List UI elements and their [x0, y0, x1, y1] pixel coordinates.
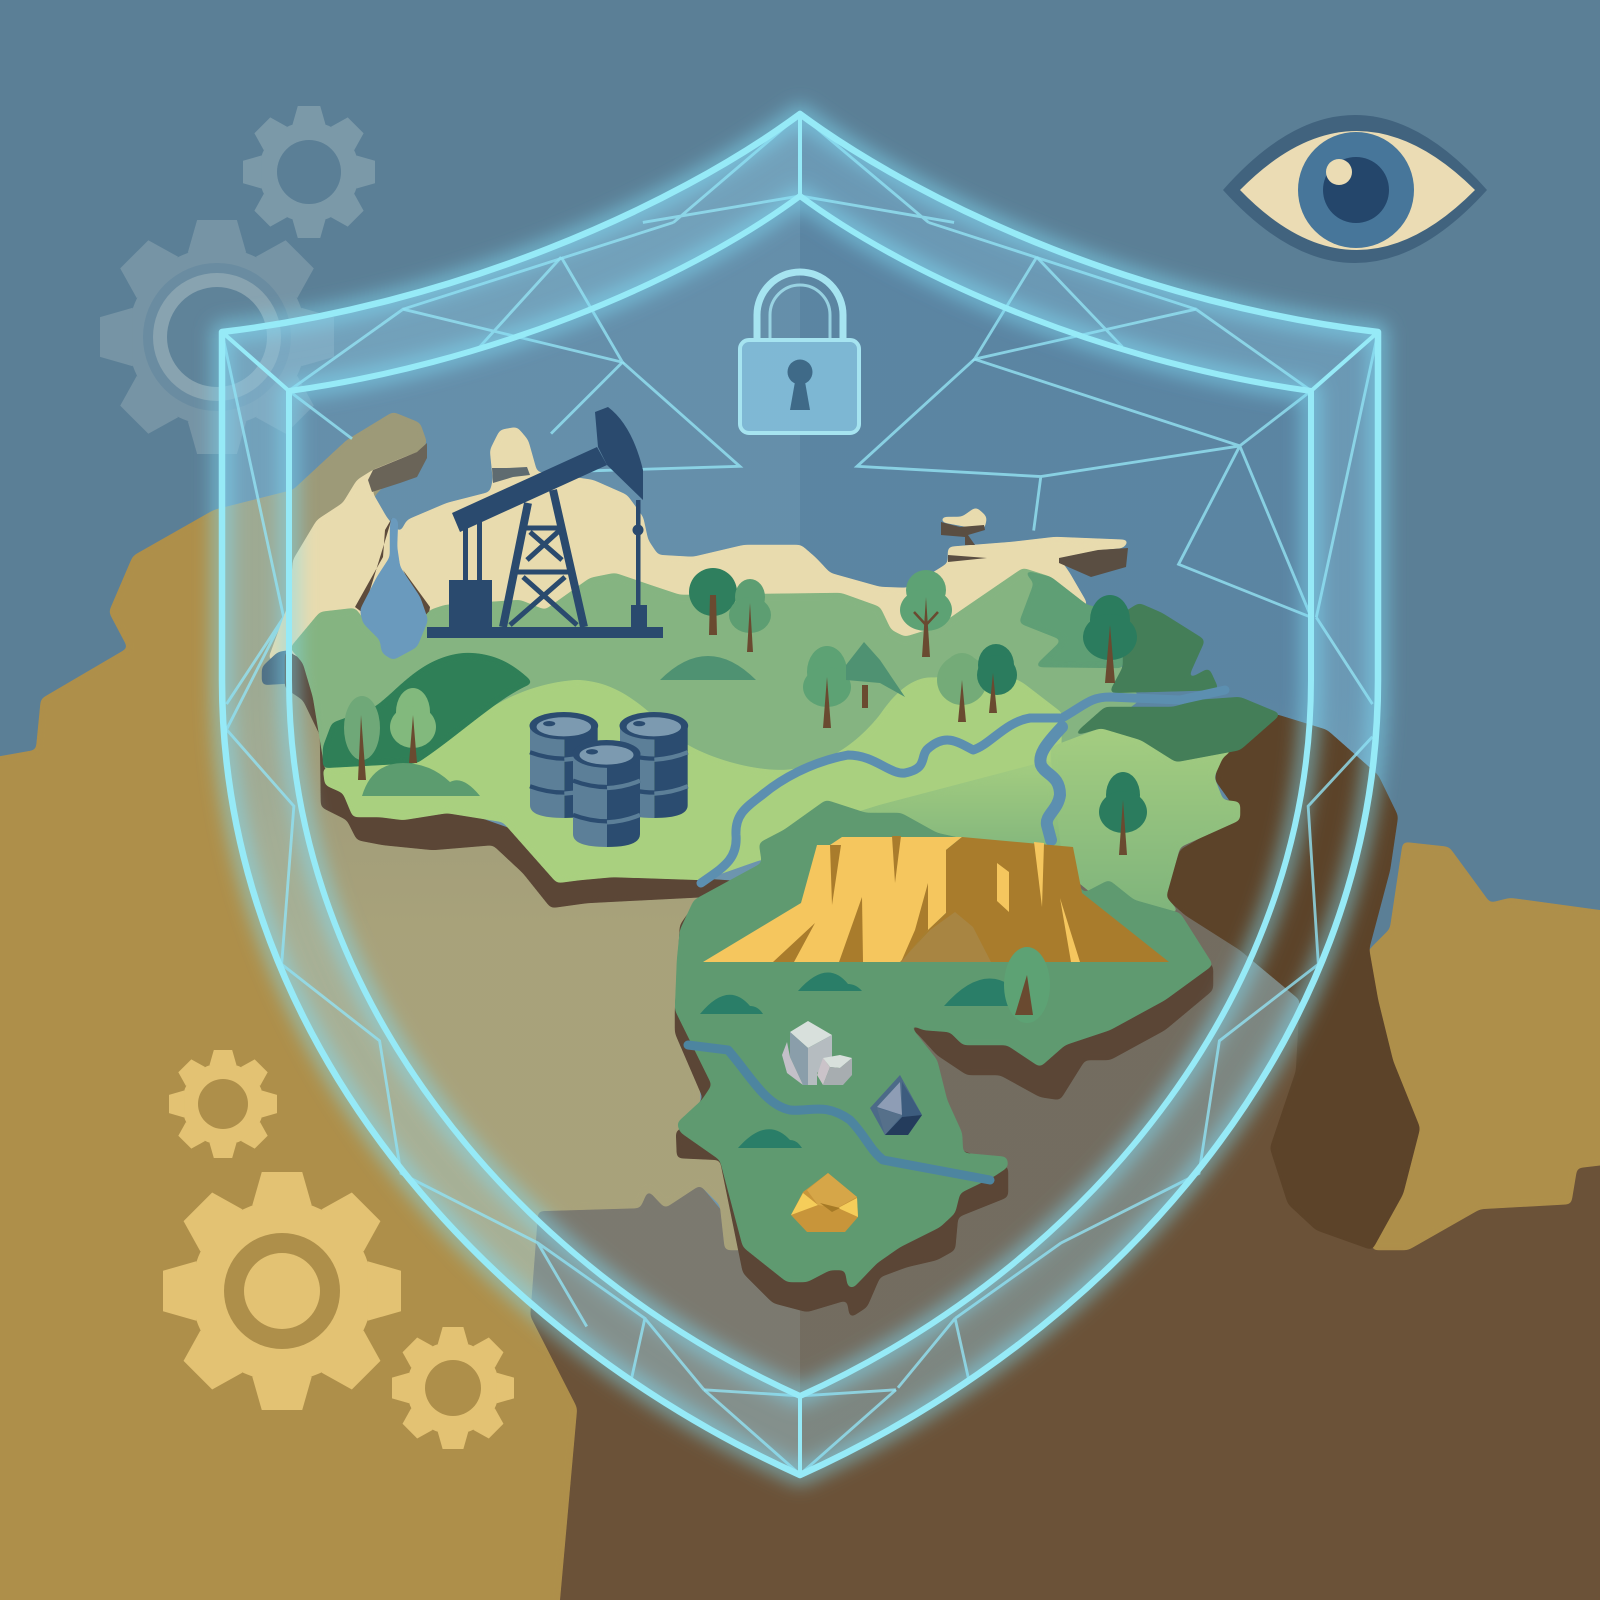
map: small hill	[660, 656, 756, 680]
tan land right	[1350, 842, 1600, 1250]
icon: gold nugget	[791, 1173, 858, 1232]
tan land left	[0, 412, 745, 1600]
map: blue-grey cliff fragment	[262, 650, 296, 685]
map: dark green hills right	[1071, 603, 1281, 762]
map: upper mid-green land	[290, 568, 1140, 860]
icon: dark gem	[870, 1075, 922, 1135]
icon: eye	[1223, 115, 1487, 263]
map: dark cliff under left land	[285, 650, 705, 908]
gear: small top left	[243, 106, 375, 238]
dark cliff right	[1165, 714, 1420, 1250]
gear: large top left	[100, 220, 334, 454]
icon: oil pumpjack	[427, 407, 663, 638]
shield: glowing frame	[222, 114, 1378, 1475]
map: lower green land cliff	[675, 877, 1213, 1318]
icon: padlock	[740, 272, 859, 433]
map: bushes left	[362, 763, 480, 796]
map: right green lowland	[1051, 728, 1240, 913]
map: table mountain mesa	[703, 836, 1169, 962]
map: oil seep droplet	[360, 515, 428, 660]
map: cream highlands and tan arm	[268, 427, 1130, 660]
map: small hills on lower land	[700, 973, 1010, 1148]
icon: oil barrels	[529, 712, 688, 847]
brown ground	[530, 800, 1600, 1600]
shield facet lines	[222, 114, 1378, 1474]
map: lower green land	[675, 800, 1213, 1288]
map: light green lowland	[323, 670, 1062, 883]
shield glass tint	[200, 100, 1400, 1500]
map: dark green hill left	[323, 653, 533, 768]
gear: tan small	[169, 1050, 277, 1158]
map: rivers	[688, 690, 1225, 1180]
map: central green gradient	[762, 760, 1062, 863]
trees	[344, 568, 1147, 1023]
gear: tan medium	[392, 1327, 514, 1449]
gear: tan large	[163, 1172, 401, 1410]
map: medium green slope	[1019, 570, 1123, 668]
icon: white crystal	[782, 1021, 852, 1085]
